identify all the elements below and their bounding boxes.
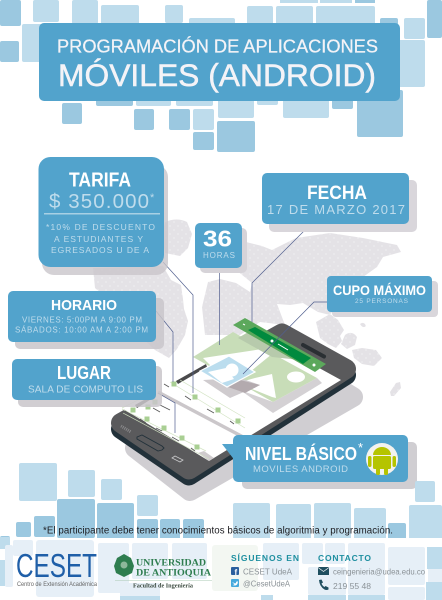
social block — [231, 553, 299, 588]
contact heading: CONTACTO — [318, 553, 371, 563]
tarifa price: $ 350.000 — [49, 190, 149, 213]
person card — [200, 356, 255, 387]
nivel heading: NIVEL BÁSICO — [245, 443, 357, 464]
hours label: HORAS — [203, 251, 235, 260]
price asterisk: * — [150, 192, 155, 204]
green app bar — [233, 318, 326, 372]
icon: android — [366, 443, 398, 475]
dotted world map — [93, 220, 401, 396]
panel: tarifa — [38, 157, 168, 275]
phone number: 219 55 48 — [333, 582, 372, 591]
icon: facebook: f — [234, 568, 238, 577]
bar shadow on card — [238, 331, 300, 360]
icon: phone — [319, 580, 328, 590]
phone face — [121, 334, 346, 470]
horario lines: SÁBADOS: 10:00 AM A 2:00 PM — [15, 326, 148, 334]
tarifa note: *10% DE DESCUENTO — [46, 222, 155, 232]
phone body edge — [121, 340, 346, 476]
cupo heading: CUPO MÁXIMO — [333, 282, 426, 298]
panel: cupo — [327, 276, 438, 317]
panel: lugar — [12, 359, 162, 407]
title line 1: PROGRAMACIÓN DE APLICACIONES — [57, 36, 378, 56]
tarifa note — [46, 222, 155, 255]
footnote: *El participante debe tener conocimientos básicos de algoritmia y programación. — [43, 526, 393, 536]
phone home button — [137, 435, 164, 451]
cupo value: 25 PERSONAS — [355, 298, 409, 305]
connector lines — [156, 224, 327, 433]
grey band — [158, 392, 245, 438]
map card — [193, 331, 322, 413]
dark top strip — [135, 364, 207, 408]
map mountain — [237, 374, 276, 398]
twitter handle: @CesetUdeA — [243, 580, 291, 588]
map sun — [287, 372, 305, 382]
logo: CESET — [16, 547, 98, 588]
logo: Universidad de Antioquia — [114, 554, 212, 590]
map card shadow — [240, 378, 322, 413]
phone shadow — [135, 360, 353, 491]
phone back button — [172, 456, 183, 462]
horario lines: VIERNES: 5:00PM A 9:00 PM — [22, 316, 142, 324]
footer squares — [0, 537, 442, 600]
panel: horario — [8, 291, 164, 349]
phone illustration — [120, 318, 353, 491]
icon: twitter — [231, 579, 239, 587]
tarifa note: A ESTUDIANTES Y — [54, 234, 143, 244]
nivel asterisk: * — [358, 440, 363, 455]
panel: horas — [195, 223, 247, 273]
fecha date: 17 DE MARZO 2017 — [267, 202, 405, 217]
tarifa heading: TARIFA — [69, 170, 131, 192]
facebook handle: CESET UdeA — [243, 568, 293, 576]
tarifa note: EGRESADOS U DE A — [51, 245, 149, 255]
university name: UNIVERSIDAD — [136, 558, 206, 568]
map white region — [203, 349, 272, 380]
lugar value: SALA DE COMPUTO LIS — [28, 384, 143, 396]
social heading: SÍGUENOS EN — [231, 553, 299, 563]
bottom decorative squares — [0, 463, 442, 550]
seal — [114, 554, 134, 577]
phone speaker grille — [121, 426, 131, 432]
icon: envelope — [318, 567, 329, 575]
nivel subtitle: MOVILES ANDROID — [253, 464, 348, 475]
contact block — [318, 553, 426, 591]
fecha heading: FECHA — [307, 183, 367, 204]
horario lines — [15, 316, 148, 334]
person card shadow — [203, 378, 260, 398]
email: ceingenieria@udea.edu.co — [333, 568, 426, 576]
phone screen — [120, 330, 341, 461]
horario heading: HORARIO — [51, 297, 117, 314]
logo: CESET: CESET — [16, 547, 97, 584]
title banner — [39, 23, 400, 101]
lugar heading: LUGAR — [57, 363, 111, 383]
screen grey corner — [198, 451, 214, 461]
hours number: 36 — [203, 226, 232, 252]
panel: fecha — [262, 173, 417, 232]
panel: nivel — [222, 435, 417, 489]
university name line 2: DE ANTIOQUIA — [136, 568, 211, 578]
top decorative squares — [0, 0, 442, 152]
phone earpiece — [303, 345, 324, 356]
title line 2: MÓVILES (ANDROID) — [58, 57, 376, 93]
CESET tagline: Centro de Extensión Académica — [17, 582, 98, 588]
faculty name: Facultad de Ingeniería — [133, 584, 193, 590]
menu rows — [122, 380, 245, 459]
